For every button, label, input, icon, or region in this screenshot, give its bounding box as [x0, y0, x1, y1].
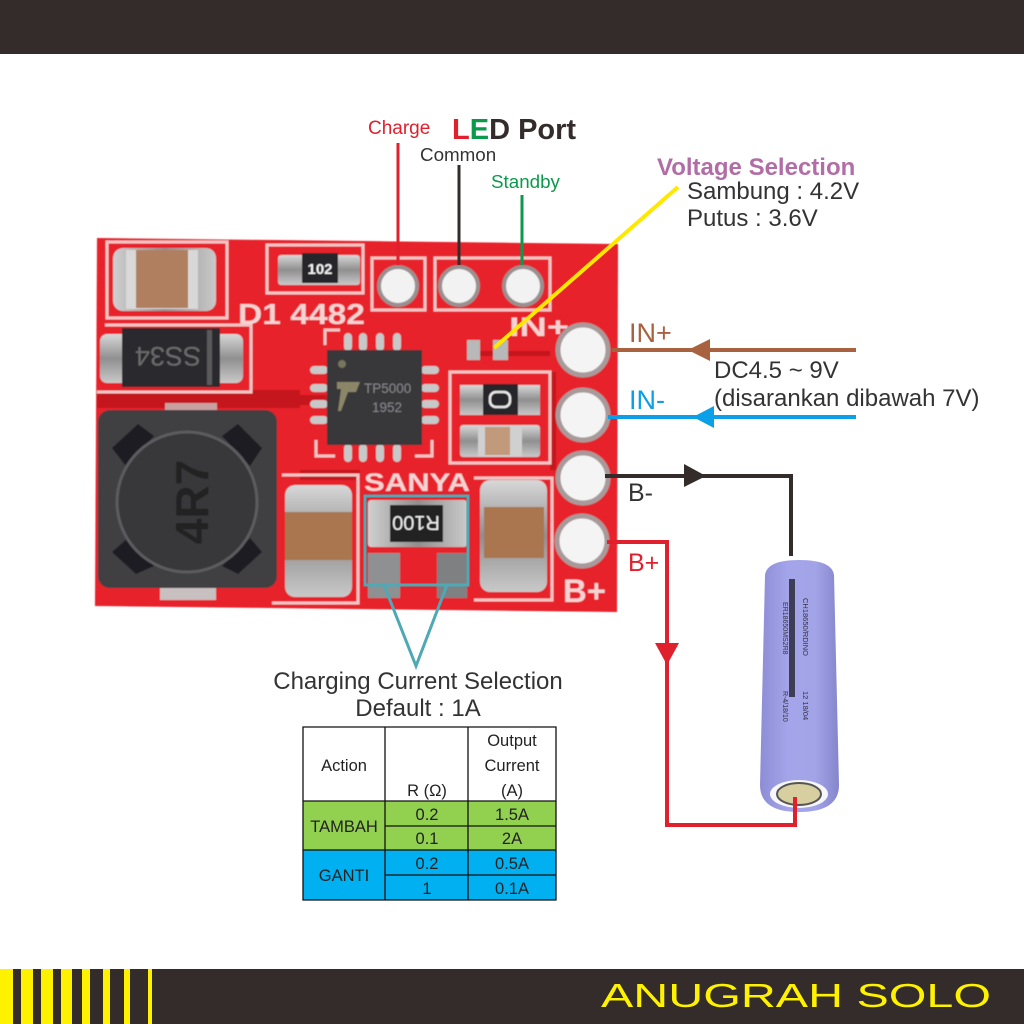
label: Charge: Charge — [368, 118, 430, 139]
label: IN+: IN+ — [629, 318, 672, 348]
input voltage note — [714, 357, 980, 412]
silkscreen labels: B+ — [563, 573, 606, 609]
capacitor bottom left — [285, 485, 352, 597]
diode SS34: SS34 — [135, 341, 201, 371]
resistor R100 — [368, 500, 467, 598]
voltage selection options: Sambung : 4.2V — [687, 178, 859, 205]
output current table: 0.1A — [495, 880, 529, 898]
output current table — [303, 727, 556, 900]
label: Common: Common — [420, 144, 496, 165]
voltage selection pointer — [494, 187, 678, 348]
board base — [95, 238, 618, 612]
resistor 0 — [460, 384, 540, 415]
battery: 12 18/04 — [801, 691, 810, 720]
output current table: R (Ω) — [407, 782, 447, 800]
output current table: 1.5A — [495, 806, 529, 824]
capacitor top left — [113, 248, 216, 311]
B+ wire with arrow — [607, 542, 795, 825]
standby wire — [520, 195, 524, 265]
silkscreen labels: IN+ — [509, 312, 569, 342]
heading: LED Port: LED Port — [452, 114, 576, 146]
silkscreen labels: SANYA — [364, 469, 470, 497]
inductor 4R7: 4R7 — [166, 460, 218, 544]
chip TP5000: 1952 — [372, 400, 402, 415]
diode SS34 — [100, 328, 243, 387]
battery: CH18650/RDINO — [801, 598, 810, 656]
battery: ER18650MS2R8 — [781, 602, 788, 655]
charge wire — [396, 143, 400, 265]
output current table: 0.5A — [495, 855, 529, 873]
output current table: TAMBAH — [310, 818, 378, 836]
charging current caption: Charging Current Selection — [273, 668, 563, 695]
resistor 102 — [278, 253, 360, 285]
output current table: 0.2 — [416, 855, 438, 873]
output current table: GANTI — [319, 867, 369, 885]
output current table: Output — [487, 732, 537, 750]
label: B+: B+ — [628, 549, 659, 577]
output current table: 2A — [502, 830, 522, 848]
header bar — [0, 0, 1024, 54]
resistor 102: 102 — [307, 261, 333, 278]
silkscreen labels — [364, 312, 606, 609]
footer bar — [0, 969, 1024, 1024]
input voltage note: (disarankan dibawah 7V) — [714, 385, 980, 412]
output current table: 1 — [422, 880, 432, 898]
charging current caption: Default : 1A — [355, 695, 481, 722]
heading: Voltage Selection: Voltage Selection — [657, 154, 855, 181]
small capacitor — [460, 425, 540, 457]
battery: R-4/18/10 — [781, 691, 788, 722]
chip TP5000 — [314, 330, 435, 458]
output current table: (A) — [501, 782, 523, 800]
output current table: Action — [321, 757, 367, 775]
charging current caption — [273, 668, 563, 722]
input voltage note: DC4.5 ~ 9V — [714, 357, 839, 384]
output current table: Current — [484, 757, 540, 775]
common wire — [458, 165, 460, 265]
voltage selection options: Putus : 3.6V — [687, 205, 818, 232]
chip TP5000: TP5000 — [364, 381, 411, 396]
inductor 4R7 — [98, 403, 277, 600]
footer yellow stripes — [0, 969, 152, 1024]
capacitor bottom right — [480, 480, 547, 592]
label: IN-: IN- — [629, 385, 665, 415]
resistor R100: R100 — [392, 511, 440, 533]
power pads — [557, 325, 608, 566]
label: B-: B- — [628, 479, 653, 507]
selection box for charging resistor — [365, 496, 468, 666]
LED port pads — [379, 267, 542, 305]
voltage selection options — [687, 178, 859, 232]
battery — [760, 560, 839, 812]
IN- wire with arrow — [608, 406, 856, 428]
silkscreen D1 4482: D1 4482 — [238, 299, 365, 331]
output current table: 0.2 — [416, 806, 438, 824]
B- wire with arrow — [605, 464, 791, 556]
IN+ wire with arrow — [612, 339, 856, 361]
brand name: ANUGRAH SOLO — [601, 977, 991, 1014]
small solder pads — [467, 340, 508, 360]
circuit board — [95, 238, 618, 612]
output current table: 0.1 — [416, 830, 438, 848]
label: Standby: Standby — [491, 171, 561, 192]
